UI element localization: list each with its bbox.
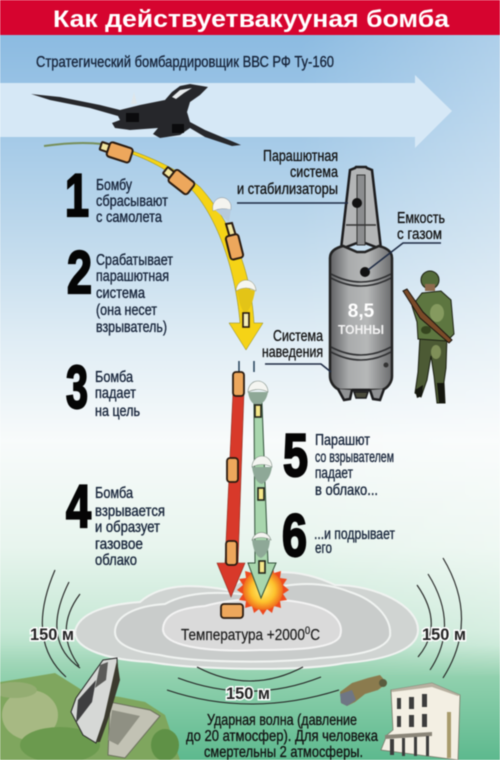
parachute with fuze on trajectory bbox=[236, 280, 256, 327]
label: parachute system and stabilisers: система bbox=[290, 164, 338, 181]
guidance legs bbox=[338, 389, 384, 400]
cloud temperature caption: Температура +2000 bbox=[181, 627, 323, 644]
parachute 1 bbox=[248, 381, 268, 417]
green detonator arrow bbox=[248, 361, 276, 598]
bomber aircraft Tu-160 bbox=[31, 84, 241, 146]
falling trajectory yellow arrow bbox=[44, 143, 263, 350]
main cylinder bbox=[330, 246, 392, 390]
label: parachute system and stabilisers: и стабилизаторы bbox=[237, 181, 338, 198]
cloud temperature caption: С bbox=[310, 627, 320, 644]
steps right column bbox=[282, 422, 396, 569]
step 6: 6 bbox=[282, 502, 307, 569]
trouser camouflage bbox=[431, 345, 441, 359]
cloud temperature caption: 0 bbox=[305, 625, 310, 637]
label: gas container: с газом bbox=[397, 226, 442, 243]
step 4: и образует bbox=[95, 519, 161, 536]
middle cloud bbox=[115, 584, 390, 662]
upper ring bbox=[331, 274, 391, 286]
label: parachute system and stabilisers bbox=[237, 148, 348, 203]
bomb: middle bbox=[227, 458, 238, 482]
label: guidance system bbox=[262, 328, 331, 372]
bomb: lower bbox=[226, 541, 237, 565]
concrete bunker bbox=[108, 702, 160, 758]
step 6: его bbox=[315, 540, 332, 557]
step 5: 5 bbox=[283, 422, 308, 489]
overturned tank bbox=[71, 658, 118, 743]
step 5: со взрывателем bbox=[315, 449, 394, 466]
label: guidance system: Система bbox=[273, 328, 323, 345]
step 4: взрывается bbox=[95, 503, 165, 520]
step 4: облако bbox=[95, 552, 137, 569]
step 3: на цель bbox=[95, 403, 140, 420]
outer cloud bbox=[75, 572, 418, 669]
lower ring bbox=[331, 347, 391, 360]
shockwave arcs bottom bbox=[167, 667, 339, 704]
step 4: Бомба bbox=[95, 485, 133, 502]
bomb 2 on trajectory bbox=[161, 164, 195, 195]
inner cloud bbox=[163, 599, 341, 650]
weight label: 8,5 bbox=[348, 301, 375, 322]
soldier bbox=[403, 271, 454, 403]
step 6: ...и подрывает bbox=[314, 526, 396, 543]
step 3: падает bbox=[95, 385, 137, 402]
step 5: падает bbox=[315, 465, 353, 482]
label: parachute system and stabilisers: Парашютная bbox=[263, 148, 338, 165]
step 5: Парашют bbox=[315, 432, 371, 449]
neck parachute port bbox=[352, 198, 362, 208]
damaged building bbox=[381, 683, 460, 760]
shockwave caption: до 20 атмосфер). Для человека bbox=[186, 728, 378, 745]
shockwave caption: Ударная волна (давление bbox=[207, 712, 357, 729]
step 2: 2 bbox=[67, 239, 92, 306]
step 3: 3 bbox=[66, 354, 88, 421]
title banner: Как действуетвакууная бомба bbox=[53, 6, 450, 33]
distance label bottom: 150 м bbox=[226, 684, 270, 703]
step 2: взрыватель) bbox=[96, 319, 167, 336]
label: gas container bbox=[368, 210, 445, 270]
step 1: Бомбу bbox=[96, 177, 132, 194]
step 4: 4 bbox=[66, 473, 91, 540]
hill bbox=[0, 673, 180, 760]
label: gas container: Емкость bbox=[397, 210, 445, 227]
gas cloud bbox=[75, 572, 418, 669]
step 5: в облако... bbox=[315, 482, 378, 499]
distance label right: 150 м bbox=[422, 625, 466, 644]
step 2: парашютная bbox=[96, 268, 169, 285]
aircraft caption: Стратегический бомбардировщик ВВС РФ Ту-160 bbox=[36, 54, 334, 71]
shockwave caption bbox=[186, 712, 378, 760]
explosion burst bbox=[237, 564, 289, 615]
step 3 bbox=[66, 354, 140, 421]
legs bbox=[415, 336, 447, 403]
steps left column bbox=[65, 162, 174, 569]
small port bbox=[384, 362, 388, 368]
parachute 3 bbox=[252, 532, 271, 573]
step 6 bbox=[282, 502, 396, 569]
vacuum bomb cross-section: ТОННЫ bbox=[338, 322, 384, 337]
rifle bbox=[403, 289, 452, 343]
step 5 bbox=[283, 422, 394, 499]
casualty figure bbox=[340, 675, 387, 706]
step 2: (она несет bbox=[96, 302, 158, 319]
step 1: с самолета bbox=[96, 209, 162, 226]
step 2: система bbox=[96, 285, 145, 302]
bomb: top bbox=[233, 372, 244, 396]
title banner bbox=[0, 0, 500, 35]
helmet and head bbox=[421, 271, 439, 289]
vacuum bomb cross-section bbox=[330, 167, 392, 400]
flight direction arrow bbox=[0, 75, 452, 148]
step 4: газовое bbox=[95, 536, 143, 553]
step 4 bbox=[66, 473, 165, 569]
gas tank port bbox=[360, 267, 370, 277]
parachute 2 bbox=[252, 456, 272, 500]
shockwave arcs right bbox=[417, 558, 462, 678]
bomb 1 on trajectory bbox=[98, 139, 133, 163]
step 2 bbox=[67, 239, 174, 336]
stabiliser neck bbox=[341, 167, 381, 249]
red bomb arrow bbox=[217, 361, 245, 618]
boots bbox=[415, 383, 445, 403]
bomb: detonated at ground bbox=[221, 604, 243, 618]
step 1: 1 bbox=[65, 162, 89, 229]
label: guidance system: наведения bbox=[262, 344, 323, 361]
step 3: Бомба bbox=[95, 369, 133, 386]
distance label left: 150 м bbox=[30, 625, 74, 644]
step 1: сбрасывают bbox=[96, 193, 169, 210]
step 1 bbox=[65, 162, 169, 229]
torso bbox=[412, 291, 454, 341]
hill with destroyed bunker and tank bbox=[0, 658, 180, 760]
shockwave arcs left bbox=[42, 570, 80, 677]
parachute deploying with bomb 3 bbox=[213, 198, 244, 260]
step 2: Срабатывает bbox=[96, 252, 174, 269]
